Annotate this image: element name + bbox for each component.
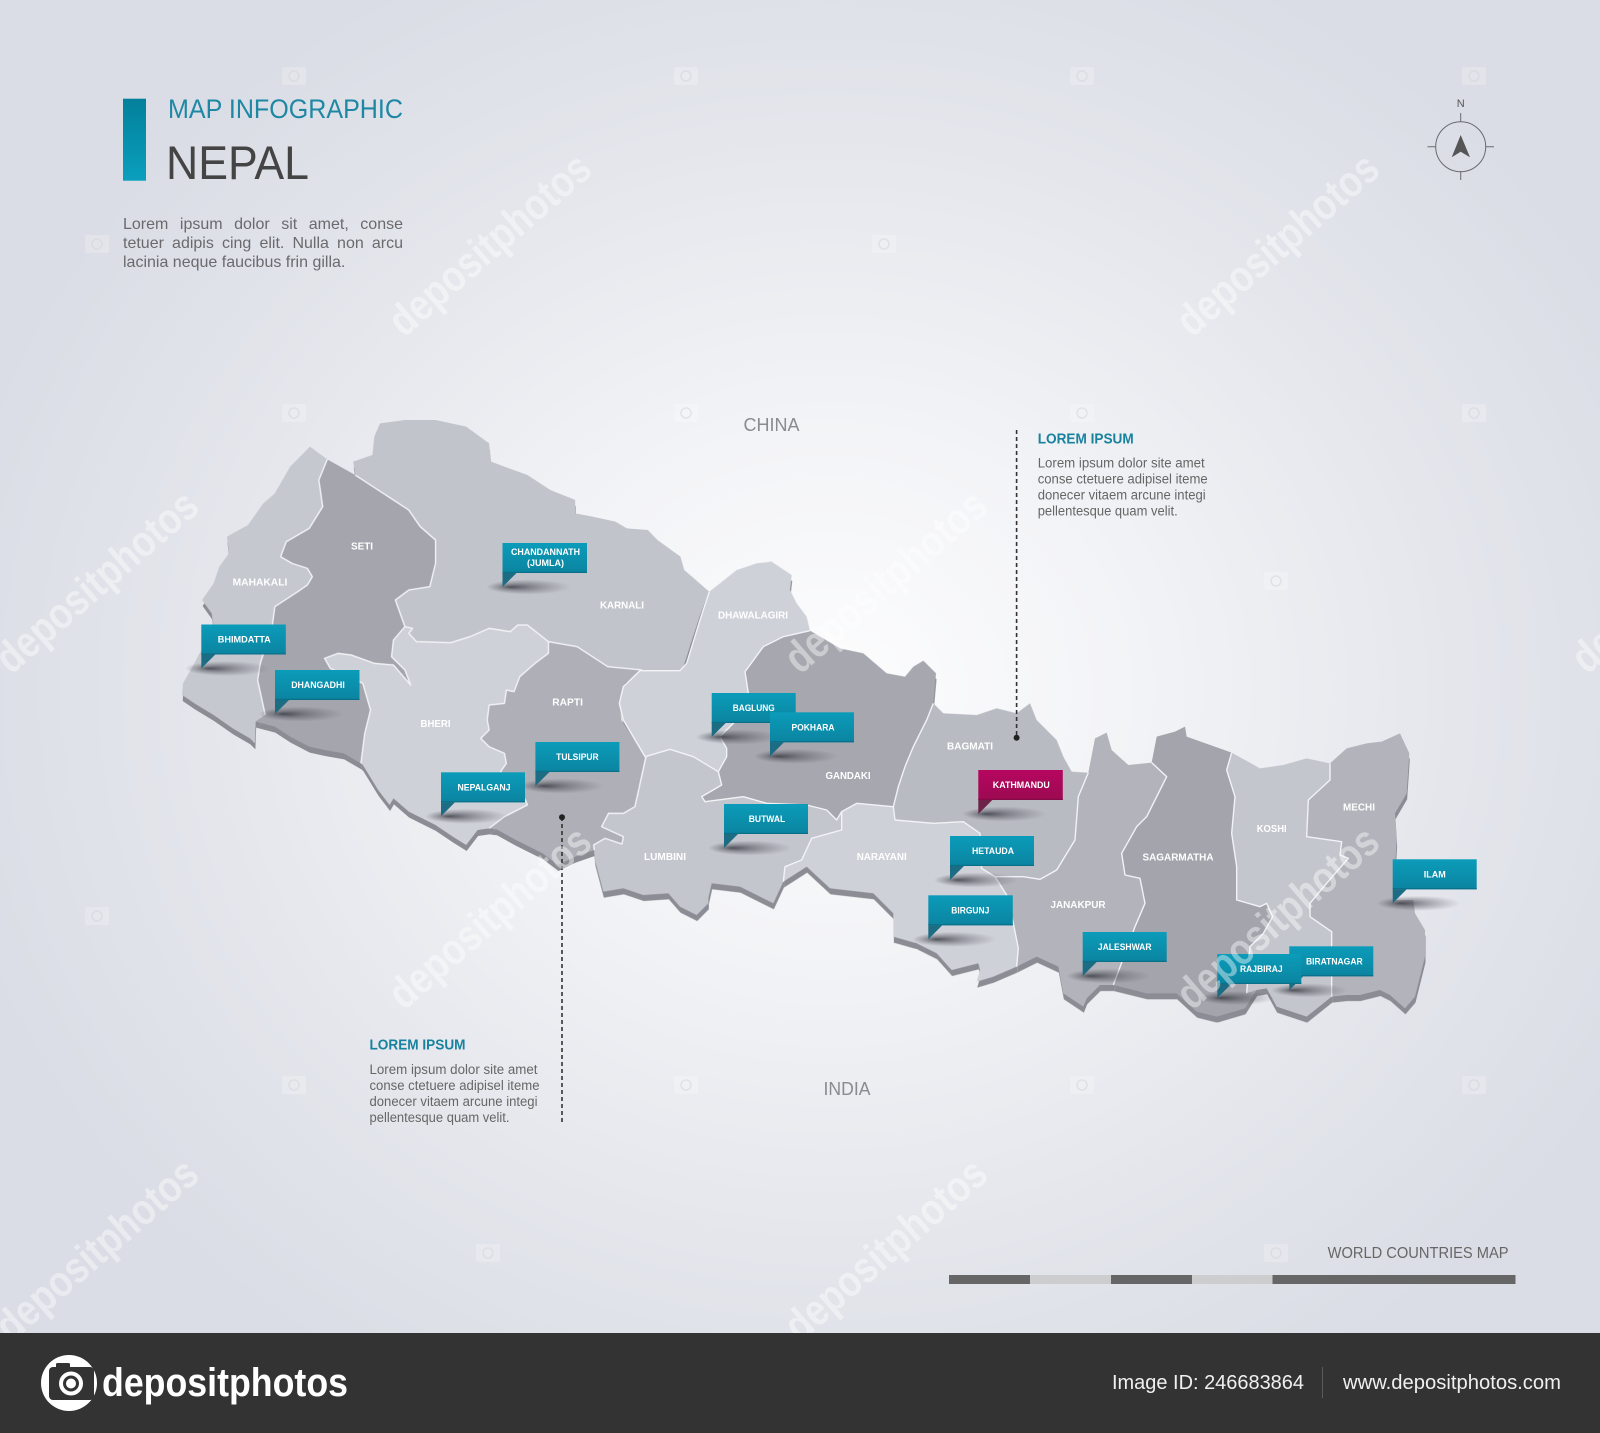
callout text: south: donecer vitaem arcune integi	[370, 1094, 538, 1109]
pin: Baglung	[696, 693, 796, 744]
pin: Baglung: BAGLUNG	[733, 703, 775, 714]
region name labels: BAGMATI	[947, 740, 993, 752]
pin: Kathmandu: KATHMANDU	[993, 780, 1050, 791]
region name labels: GANDAKI	[826, 770, 871, 782]
region: Narayani	[783, 803, 1018, 982]
intro paragraph: lacinia neque faucibus frin gilla.	[123, 254, 345, 271]
pin: Jaleshwar: JALESHWAR	[1098, 942, 1152, 953]
region name labels: SAGARMATHA	[1142, 852, 1214, 864]
scale bar	[949, 1275, 1516, 1284]
pin: Tulsipur	[519, 742, 619, 794]
watermarks: depositphotos	[379, 816, 601, 1019]
region: Mechi	[1307, 733, 1425, 1008]
pin: Chandannath (Jumla)	[486, 543, 587, 594]
region name labels: DHAWALAGIRI	[718, 610, 788, 622]
watermarks: depositphotos	[379, 143, 601, 346]
region: Karnali	[353, 420, 709, 670]
region name labels: NARAYANI	[857, 851, 907, 863]
callout text: north: conse ctetuere adipisel iteme	[1038, 472, 1208, 486]
pin: Jaleshwar	[1067, 932, 1167, 984]
region name labels: RAPTI	[552, 696, 583, 708]
callout text: north	[1038, 432, 1208, 518]
region name labels	[233, 540, 1375, 911]
compass: N	[1457, 98, 1465, 110]
pin: Biratnagar	[1271, 946, 1373, 997]
map side extrusion	[183, 426, 1425, 1023]
intro paragraph: Lorem ipsum dolor sit amet, conse	[123, 216, 403, 233]
region: Sagarmatha	[1113, 727, 1273, 1017]
region name labels: KARNALI	[600, 600, 644, 612]
footer logo	[41, 1355, 348, 1411]
callout text: south: conse ctetuere adipisel iteme	[370, 1078, 540, 1093]
pin: Birgunj	[912, 895, 1013, 947]
region name labels: LUMBINI	[644, 851, 686, 863]
country label: China: CHINA	[744, 415, 800, 435]
region: Bagmati	[893, 703, 1088, 879]
region name labels: MAHAKALI	[233, 576, 287, 588]
subtitle: MAP INFOGRAPHIC	[168, 94, 403, 124]
pin: Chandannath (Jumla): CHANDANNATH	[511, 547, 580, 558]
region: Bheri	[325, 625, 548, 845]
watermarks: depositphotos	[1167, 816, 1389, 1019]
pin: Bhimdatta	[185, 624, 286, 676]
caption: world countries map: WORLD COUNTRIES MAP	[1328, 1245, 1509, 1262]
region: Lumbini	[593, 749, 842, 915]
pin: Ilam	[1377, 859, 1477, 911]
callout text: north: Lorem ipsum dolor site amet	[1038, 456, 1205, 470]
region: Janakpur	[995, 733, 1167, 1007]
pin: Rajbiraj	[1199, 954, 1301, 1005]
callout leader: south	[559, 814, 565, 1124]
callout text: north: pellentesque quam velit.	[1038, 504, 1178, 518]
camera watermark icons	[85, 67, 1486, 1262]
pin: Rajbiraj: RAJBIRAJ	[1240, 964, 1283, 975]
pin: Hetauda	[934, 836, 1034, 888]
map of Nepal regions	[182, 420, 1425, 1017]
watermarks: depositphotos	[775, 480, 997, 683]
title accent bar	[123, 99, 146, 181]
pin: Pokhara	[754, 712, 854, 764]
image id: Image ID: 246683864	[1112, 1372, 1304, 1394]
region borders	[258, 459, 1348, 997]
callout leader: north	[1014, 430, 1020, 741]
callout text: south: Lorem ipsum dolor site amet	[370, 1062, 538, 1077]
pin: Kathmandu	[962, 770, 1063, 822]
footer logo: depositphotos	[102, 1361, 348, 1405]
compass	[1428, 98, 1494, 180]
callout text: north: LOREM IPSUM	[1038, 432, 1134, 448]
pin: Birgunj: BIRGUNJ	[951, 905, 989, 916]
pin: Pokhara: POKHARA	[792, 722, 835, 733]
callout text: south	[370, 1038, 540, 1125]
website: www.depositphotos.com	[1342, 1372, 1561, 1394]
region: Koshi	[1227, 753, 1348, 1017]
pin: Nepalganj	[425, 772, 525, 824]
pin: Dhangadhi	[259, 670, 360, 722]
pin: Hetauda: HETAUDA	[972, 846, 1014, 857]
region: Dhawalagiri	[619, 562, 810, 772]
pin: Butwal	[708, 804, 808, 856]
region name labels: BHERI	[420, 718, 451, 730]
pin: Bhimdatta: BHIMDATTA	[218, 634, 271, 646]
region name labels: JANAKPUR	[1050, 899, 1106, 911]
callout text: north: donecer vitaem arcune integi	[1038, 488, 1206, 502]
pin: Chandannath (Jumla): (JUMLA)	[527, 558, 564, 569]
pin: Biratnagar: BIRATNAGAR	[1306, 956, 1363, 967]
watermarks: depositphotos	[775, 1148, 997, 1351]
intro paragraph: tetuer adipis cing elit. Nulla non arcu	[123, 235, 403, 252]
title: NEPAL	[166, 136, 309, 189]
region name labels: SETI	[351, 540, 373, 552]
region name labels: MECHI	[1343, 802, 1375, 814]
pin: Nepalganj: NEPALGANJ	[458, 782, 510, 793]
callout text: south: pellentesque quam velit.	[370, 1110, 510, 1125]
pin: Butwal: BUTWAL	[749, 814, 785, 825]
region: Mahakali	[182, 447, 327, 743]
region name labels: KOSHI	[1257, 823, 1287, 835]
pin: Ilam: ILAM	[1424, 869, 1446, 880]
footer band	[0, 1333, 1600, 1433]
callout text: south: LOREM IPSUM	[370, 1038, 466, 1054]
region: Rapti	[481, 642, 646, 865]
pin: Dhangadhi: DHANGADHI	[291, 680, 345, 691]
region: Gandaki	[702, 631, 936, 820]
intro paragraph	[123, 216, 403, 271]
watermarks: depositphotos	[1167, 143, 1389, 346]
country label: India: INDIA	[824, 1079, 870, 1099]
pin: Tulsipur: TULSIPUR	[556, 752, 599, 763]
region: Seti	[256, 459, 436, 763]
